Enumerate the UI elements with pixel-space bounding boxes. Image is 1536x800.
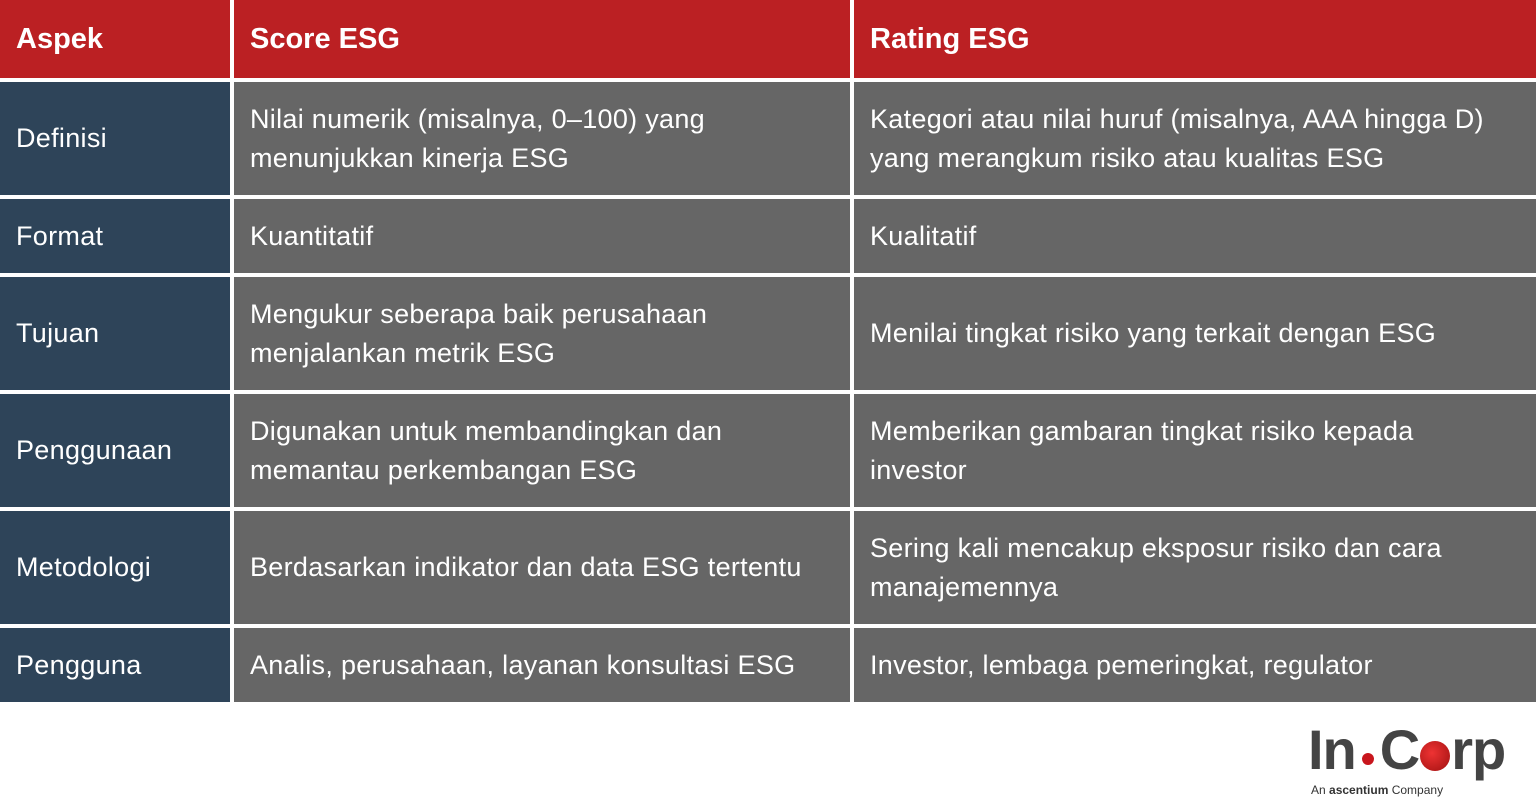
table: menjalankan metrik ESG [250, 338, 555, 368]
header: Score ESG [234, 0, 850, 78]
header: Rating ESG: Rating ESG [870, 22, 1030, 54]
table: yang merangkum risiko atau kualitas ESG [870, 142, 1384, 172]
table: Kategori atau nilai huruf (misalnya, AAA hingga D) [870, 104, 1484, 134]
table: Analis, perusahaan, layanan konsultasi ESG [250, 650, 795, 680]
table: manajemennya [870, 572, 1058, 602]
row: Penggunaan [0, 394, 230, 507]
row: Format [0, 199, 230, 273]
table: memantau perkembangan ESG [250, 454, 637, 484]
logo: InCorp: An ascentium Company [1311, 783, 1443, 797]
table: investor [870, 454, 967, 484]
row: Tujuan [0, 277, 230, 390]
row: Format: Format [16, 220, 103, 250]
table: Investor, lembaga pemeringkat, regulator [870, 650, 1373, 680]
header: Rating ESG [854, 0, 1536, 78]
table: Digunakan untuk membandingkan dan [250, 416, 722, 446]
header: Score ESG: Score ESG [250, 22, 400, 54]
table: Memberikan gambaran tingkat risiko kepada [870, 416, 1414, 446]
header: Aspek: Aspek [16, 22, 103, 54]
table: Kualitatif [870, 220, 977, 250]
table: Kuantitatif [250, 220, 373, 250]
row: Metodologi [0, 511, 230, 624]
table: menunjukkan kinerja ESG [250, 142, 569, 172]
table: Nilai numerik (misalnya, 0–100) yang [250, 104, 705, 134]
table: Berdasarkan indikator dan data ESG tertentu [250, 552, 802, 582]
logo: InCorp: In C rp [1308, 718, 1505, 781]
row: Pengguna: Pengguna [16, 650, 142, 680]
header: Aspek [0, 0, 230, 78]
row: Definisi [0, 82, 230, 195]
table: Sering kali mencakup eksposur risiko dan cara [870, 532, 1442, 562]
row: Penggunaan: Penggunaan [16, 435, 172, 465]
row: Pengguna [0, 628, 230, 702]
row: Definisi: Definisi [16, 123, 107, 153]
row: Tujuan: Tujuan [16, 318, 99, 348]
row: Metodologi: Metodologi [16, 552, 151, 582]
table: Menilai tingkat risiko yang terkait dengan ESG [870, 318, 1436, 348]
table: Mengukur seberapa baik perusahaan [250, 298, 707, 328]
